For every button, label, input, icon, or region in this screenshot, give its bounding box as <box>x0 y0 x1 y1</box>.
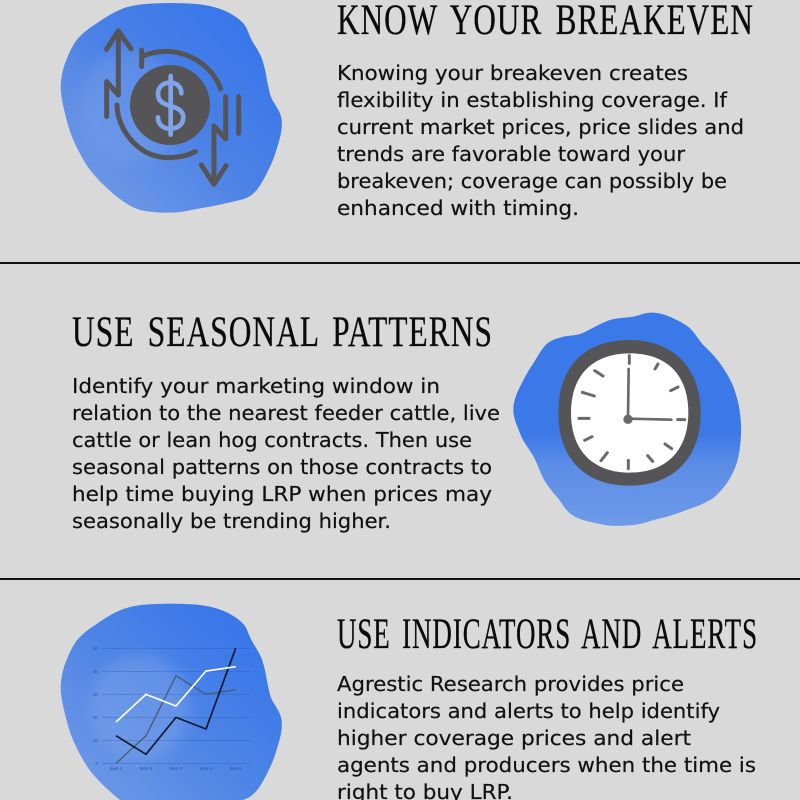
icon: line chart on blue blob: Item 3 <box>170 766 183 771</box>
panel: use indicators and alerts <box>61 604 758 800</box>
text block: seasonal body: seasonally be trending higher. <box>72 509 391 533</box>
text block: breakeven body: enhanced with timing. <box>337 196 579 220</box>
text block: breakeven body <box>337 61 744 220</box>
icon: line chart on blue blob: 30 <box>93 692 98 697</box>
icon: line chart on blue blob: 50 <box>93 646 98 651</box>
icon: dollar with arrows on blue blob <box>61 3 282 213</box>
text block: breakeven body: trends are favorable toward your <box>337 142 686 166</box>
icon: line chart on blue blob: 40 <box>93 669 98 674</box>
icon: line chart on blue blob: 0 <box>95 761 98 766</box>
icon: line chart on blue blob: 20 <box>93 715 98 720</box>
panel: use seasonal patterns <box>72 309 741 533</box>
icon: line chart on blue blob: Item 2 <box>140 766 153 771</box>
text block: seasonal body: cattle or lean hog contracts. Then use <box>72 428 472 452</box>
text block: indicators body: higher coverage prices and alert <box>337 726 691 750</box>
icon: line chart on blue blob: 10 <box>93 738 98 743</box>
text block: breakeven body: current market prices, price slides and <box>337 115 744 139</box>
text block: indicators body: agents and producers when the time is <box>337 753 756 777</box>
text block: indicators body: Agrestic Research provides price <box>337 672 684 696</box>
text block: indicators body <box>337 672 756 800</box>
icon: clock on blue blob <box>513 313 741 526</box>
text block: seasonal body: Identify your marketing window in <box>72 374 440 398</box>
text block: breakeven body: flexibility in establishing coverage. If <box>337 88 728 112</box>
icon: line chart on blue blob: Item 4 <box>200 766 213 771</box>
icon: line chart on blue blob: Item 1 <box>110 766 123 771</box>
panel: know your breakeven <box>61 0 754 220</box>
text block: seasonal body <box>72 374 500 533</box>
icon: line chart on blue blob <box>61 604 282 800</box>
heading: use seasonal patterns: USE SEASONAL PATTERNS <box>72 309 493 356</box>
icon: line chart on blue blob: Item 5 <box>230 766 242 771</box>
text block: breakeven body: breakeven; coverage can possibly be <box>337 169 727 193</box>
text block: seasonal body: relation to the nearest feeder cattle, live <box>72 401 500 425</box>
text block: seasonal body: help time buying LRP when prices may <box>72 482 492 506</box>
text block: breakeven body: Knowing your breakeven creates <box>337 61 688 85</box>
text block: indicators body: indicators and alerts to help identify <box>337 699 720 723</box>
text block: seasonal body: seasonal patterns on those contracts to <box>72 455 492 479</box>
